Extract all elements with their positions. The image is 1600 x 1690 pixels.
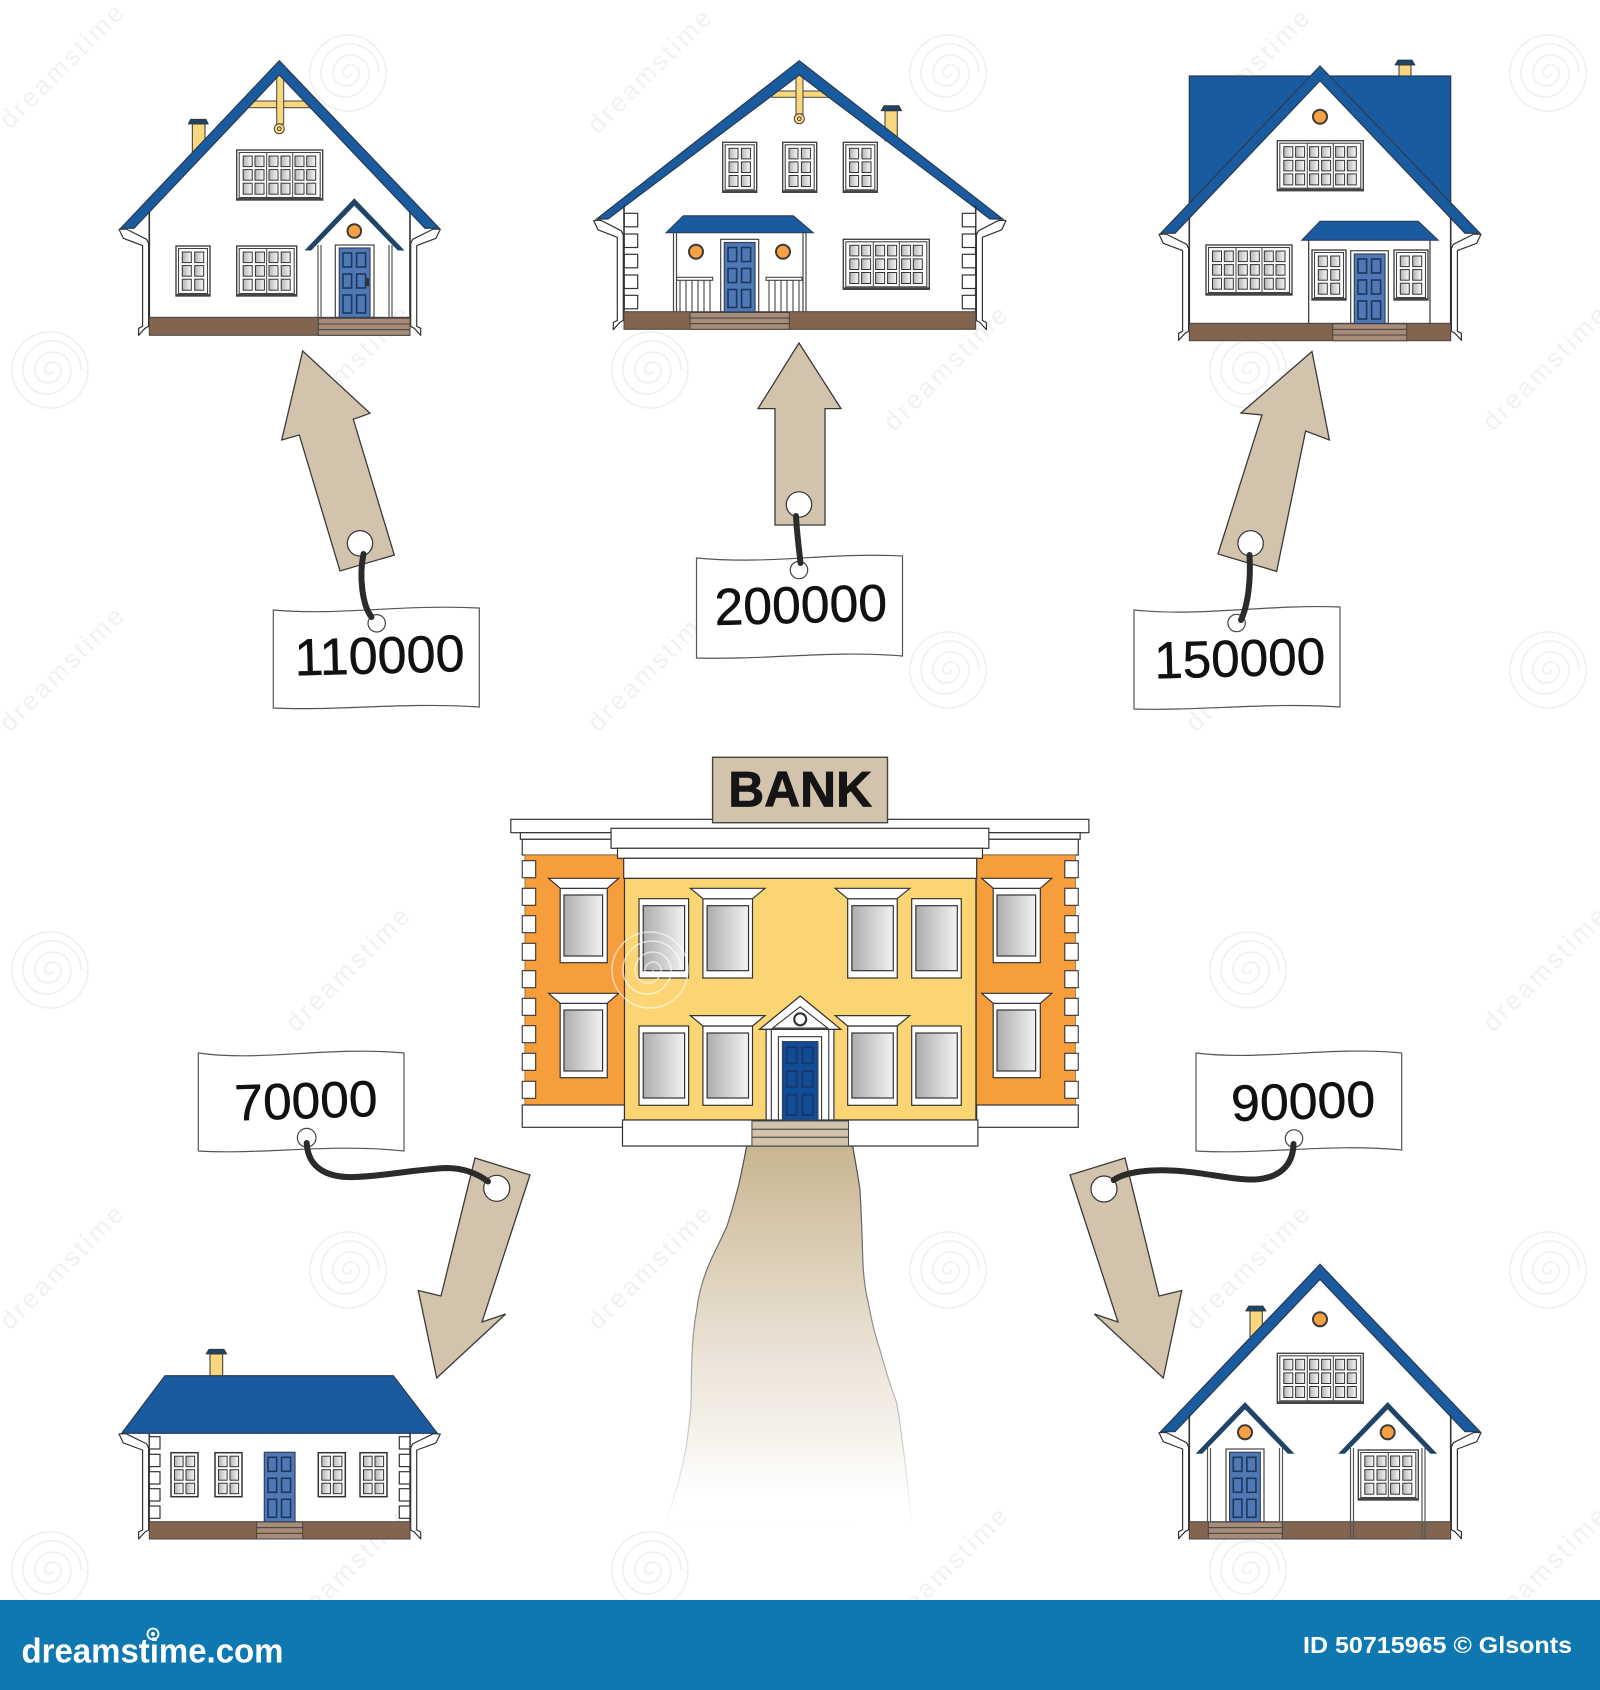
- round window: [1313, 110, 1327, 124]
- entrance portico: [760, 996, 841, 1120]
- roof: [1161, 66, 1480, 233]
- house: bottom right: [1159, 1264, 1481, 1539]
- footer logo: dreamstime.com: [22, 1633, 284, 1671]
- price tag: 200000: 200000: [714, 575, 888, 637]
- roof truss: [249, 72, 310, 134]
- steps: [257, 1522, 303, 1539]
- price tag: 70000: [198, 1051, 488, 1182]
- quoins: [149, 1437, 410, 1518]
- gutters: [119, 229, 440, 335]
- arrow: to bottom-right house: [1070, 1158, 1182, 1378]
- background watermark: dreamstime: [581, 1197, 720, 1335]
- back roof: [1189, 76, 1451, 206]
- background watermark: dreamstime: [877, 1499, 1016, 1637]
- price tag: 200000: [696, 516, 902, 658]
- sign bolts: [734, 820, 869, 829]
- quoins: [624, 213, 976, 309]
- gutters: [594, 220, 1006, 330]
- windows: [176, 150, 323, 296]
- roof truss: [772, 72, 828, 124]
- walls: [149, 212, 410, 318]
- porch: [666, 216, 813, 312]
- house: bottom left: [119, 1349, 440, 1539]
- house: top left: [119, 61, 440, 335]
- walls: [624, 205, 976, 312]
- central block: [624, 878, 976, 1120]
- foundation: [149, 317, 410, 335]
- round window: [1313, 1312, 1327, 1326]
- background watermark: dreamstime: [1179, 1197, 1318, 1335]
- price tag: 150000: [1134, 555, 1340, 709]
- roof: [121, 61, 439, 228]
- foundation: [624, 312, 976, 329]
- quoins: [522, 861, 1078, 1098]
- price tag: 110000: 110000: [294, 625, 465, 687]
- footer credit: ID 50715965 © Glsonts: [1303, 1632, 1572, 1658]
- side wings: [525, 855, 1075, 1105]
- background watermark: dreamstime: [279, 899, 418, 1037]
- walls: [1189, 1415, 1451, 1522]
- roof: [1161, 1264, 1480, 1432]
- price tag: 90000: 90000: [1230, 1070, 1376, 1132]
- price tag: 150000: 150000: [1153, 628, 1326, 690]
- foundation: [1189, 323, 1451, 341]
- price tag: 110000: [273, 554, 479, 709]
- bank building: [511, 757, 1089, 1146]
- chimney: [881, 106, 902, 141]
- porch: [306, 199, 403, 318]
- gutters: [119, 1434, 440, 1539]
- house: top centre: [594, 61, 1006, 330]
- gutters: [1159, 1432, 1481, 1539]
- road from bank: [665, 1146, 912, 1526]
- bank steps: [752, 1121, 848, 1146]
- steps: [690, 312, 789, 329]
- background watermark: dreamstime: [279, 1499, 418, 1637]
- porch: window: [1339, 1403, 1436, 1539]
- walls: [1189, 217, 1451, 324]
- arrow: to top-right house: [1218, 352, 1329, 571]
- porch: door: [1197, 1403, 1293, 1522]
- foundation: [1189, 1522, 1451, 1539]
- arrow: to bottom-left house: [418, 1158, 530, 1378]
- background watermark: dreamstime: [279, 298, 418, 436]
- steps: [1333, 324, 1407, 341]
- steps: [1208, 1522, 1282, 1539]
- background watermark: dreamstime: [877, 298, 1016, 436]
- wing bases: [522, 1105, 1078, 1127]
- background watermark: dreamstime: [581, 1, 720, 139]
- central base: [622, 1120, 978, 1146]
- central cornice: [611, 828, 989, 878]
- side wings roof: [511, 819, 1089, 855]
- bank watermark spiral: [612, 932, 688, 1008]
- door: [264, 1452, 295, 1522]
- price tag: 70000: 70000: [234, 1070, 378, 1131]
- windows: [1206, 141, 1428, 300]
- background watermark: dreamstime: [877, 899, 1016, 1037]
- walls: [149, 1433, 410, 1522]
- porch: [1302, 221, 1438, 323]
- arrow: to top-left house: [282, 351, 394, 571]
- bank sign: BANK: [728, 762, 872, 818]
- background watermark: dreamstime: [1179, 599, 1318, 737]
- footer bar: [0, 1600, 1600, 1690]
- gutters: [1159, 234, 1481, 340]
- railings: [677, 277, 802, 312]
- house: top right: [1159, 60, 1481, 341]
- chimney: [188, 119, 208, 152]
- arrow: to top-centre house: [758, 343, 841, 525]
- chimney: [206, 1349, 227, 1376]
- steps: [318, 318, 410, 335]
- bank windows: [549, 878, 1052, 1105]
- price tag: 90000: [1114, 1051, 1402, 1180]
- windows: [723, 142, 929, 289]
- foundation: [149, 1522, 410, 1539]
- chimney: [1246, 1306, 1266, 1339]
- background watermark: dreamstime: [1179, 1, 1318, 139]
- chimney: [1395, 60, 1415, 76]
- background watermark: dreamstime: [581, 599, 720, 737]
- roof: [122, 1376, 437, 1433]
- gable wall: [1175, 81, 1465, 240]
- roof: [597, 61, 1003, 219]
- upper window: [1277, 1353, 1363, 1403]
- windows: [171, 1453, 387, 1497]
